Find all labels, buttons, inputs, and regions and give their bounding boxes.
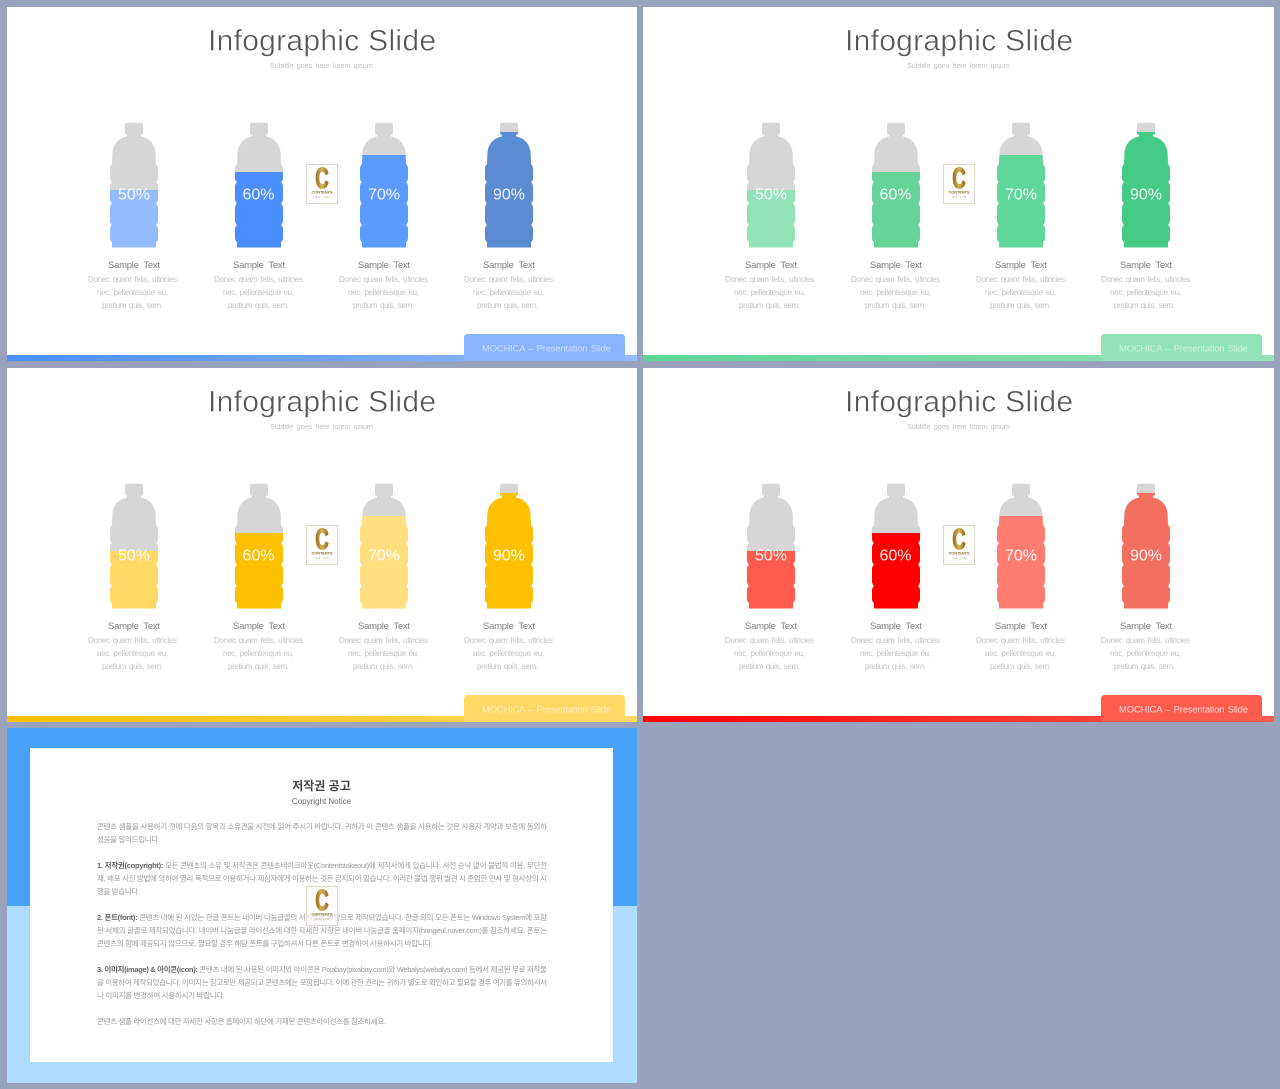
- footer tab: MOCHICA – Presentation Slide: [482, 704, 611, 716]
- caption column 4: pretium quis, sem.: [477, 662, 538, 671]
- logo: [306, 163, 338, 204]
- caption column 2: nec, pellentesque eu,: [223, 288, 294, 297]
- caption column 1: Donec quam felis, ultricies: [88, 275, 177, 284]
- caption column 1: nec, pellentesque eu,: [97, 649, 168, 658]
- footer tab: [464, 334, 625, 361]
- caption column 4: nec, pellentesque eu,: [1110, 649, 1181, 658]
- caption column 1: pretium quis, sem.: [102, 301, 163, 310]
- bottom band: [643, 716, 1274, 722]
- logo: C: [953, 524, 965, 556]
- bottle: 90%: [1122, 123, 1170, 248]
- bottle: 70%: [360, 484, 408, 608]
- section 1: copyright: 1. 저작권(copyright): 모든 콘텐츠의 소유 및 저작권은 콘텐츠테이크아웃(Contentstakeout)에 제작사에게 있습니다. 사전 승낙 없이 불법적 이용, 무단전: [97, 860, 547, 870]
- caption column 3: Sample Text: [995, 260, 1047, 271]
- caption column 3: nec, pellentesque eu,: [985, 649, 1056, 658]
- caption column 1: pretium quis, sem.: [739, 662, 800, 671]
- bottom band: [643, 355, 1274, 361]
- caption column 2: [214, 260, 303, 310]
- caption column 4: Sample Text: [1120, 260, 1172, 271]
- bottle: 50%: 50%: [118, 186, 150, 204]
- caption column 4: pretium quis, sem.: [1114, 301, 1175, 310]
- bottle: 70%: 70%: [1005, 186, 1037, 204]
- caption column 4: [1101, 260, 1190, 310]
- bottle: 90%: 90%: [1130, 548, 1162, 564]
- caption column 1: pretium quis, sem.: [739, 301, 800, 310]
- bottle: 90%: 90%: [493, 186, 525, 204]
- bottle: 60%: [872, 123, 920, 248]
- caption column 1: pretium quis, sem.: [102, 662, 163, 671]
- bottle: 70%: 70%: [1005, 548, 1037, 564]
- logo: MAIL . COM: [315, 917, 329, 921]
- caption column 2: [851, 621, 940, 671]
- caption column 2: Sample Text: [870, 260, 922, 271]
- footer tab: MOCHICA – Presentation Slide: [1119, 344, 1248, 354]
- caption column 4: Sample Text: [483, 621, 535, 632]
- footer tab: MOCHICA – Presentation Slide: [482, 344, 611, 354]
- caption column 2: Donec quam felis, ultricies: [851, 275, 940, 284]
- footer tab: [1101, 695, 1262, 722]
- logo: C: [316, 885, 328, 917]
- panel: blue bottle slide: [7, 7, 637, 361]
- logo: C: [953, 163, 965, 195]
- caption column 1: Sample Text: [745, 260, 797, 271]
- caption column 3: [976, 621, 1065, 671]
- caption column 1: Sample Text: [745, 621, 797, 632]
- bottom band: [7, 355, 637, 361]
- bottle: 60%: 60%: [242, 548, 275, 564]
- caption column 2: [851, 260, 940, 310]
- caption column 4: pretium quis, sem.: [477, 301, 538, 310]
- subtitle: Subtitle goes here lorem ipsum: [907, 61, 1010, 70]
- caption column 1: [725, 260, 814, 310]
- caption column 2: Sample Text: [233, 260, 285, 271]
- bottle: 50%: 50%: [755, 186, 787, 204]
- caption column 4: Donec quam felis, ultricies: [464, 636, 553, 645]
- bottle: 50%: 50%: [118, 548, 150, 564]
- bottle: 90%: 90%: [493, 548, 525, 564]
- caption column 3: Donec quam felis, ultricies: [339, 636, 428, 645]
- title: Infographic Slide: [208, 24, 436, 58]
- logo: [306, 885, 338, 926]
- bottle: 60%: 60%: [879, 186, 912, 204]
- title: Infographic Slide: [845, 24, 1073, 58]
- panel: copyright notice: [7, 728, 637, 1083]
- panel: green bottle slide: [643, 7, 1274, 361]
- logo: C: [316, 163, 328, 195]
- caption column 2: Donec quam felis, ultricies: [851, 636, 940, 645]
- section 2: font: 된 서체의 글꼴로 제작되었습니다. 네이버 나눔글꼴 라이선스에 대한 자세한 사항은 네이버 나눔글꼴 홈페이지(hangeul.naver.com)를 참조하세요. 폰트는: [97, 925, 547, 935]
- caption column 4: [464, 260, 553, 310]
- caption column 4: Donec quam felis, ultricies: [1101, 636, 1190, 645]
- caption column 2: nec, pellentesque eu,: [223, 649, 294, 658]
- bottle: 60%: [235, 123, 283, 248]
- caption column 3: nec, pellentesque eu,: [348, 649, 419, 658]
- caption column 4: Sample Text: [1120, 621, 1172, 632]
- logo: CONTENTS: [948, 550, 970, 556]
- caption column 2: Donec quam felis, ultricies: [214, 275, 303, 284]
- caption column 3: nec, pellentesque eu,: [985, 288, 1056, 297]
- caption column 2: Sample Text: [233, 621, 285, 632]
- subtitle: Subtitle goes here lorem ipsum: [270, 422, 373, 431]
- caption column 3: Donec quam felis, ultricies: [976, 275, 1065, 284]
- caption column 1: nec, pellentesque eu,: [734, 288, 805, 297]
- caption column 1: Sample Text: [108, 260, 160, 271]
- logo: MAIL . COM: [315, 556, 329, 560]
- caption column 3: [976, 260, 1065, 310]
- section 3: image and icon: [97, 964, 547, 1000]
- bottle: 60%: 60%: [879, 548, 912, 564]
- caption column 1: nec, pellentesque eu,: [97, 288, 168, 297]
- section 2: font: 콘텐츠의 함에 제공되지 않으므로, 필요할 경우 해당 폰트를 구입하셔서 다른 폰트로 변경하여 사용하시기 바랍니다.: [97, 938, 433, 948]
- intro paragraph: 콘텐츠 샘플을 사용하기 전에 다음의 항목과 소유권을 사전에 읽어 주시기 바랍니다. 귀하가 이 콘텐츠 샘플을 사용하는 것은 사용자 계약과 보증에 동의하: [97, 821, 547, 831]
- caption column 4: Sample Text: [483, 260, 535, 271]
- caption column 4: nec, pellentesque eu,: [473, 288, 544, 297]
- caption column 3: [339, 260, 428, 310]
- bottle: 90%: [485, 484, 533, 608]
- caption column 2: [214, 621, 303, 671]
- bottle: 50%: [747, 123, 795, 248]
- bottle: 50%: [110, 484, 158, 608]
- bottle: 60%: 60%: [242, 186, 275, 204]
- caption column 4: [1101, 621, 1190, 671]
- footer tab: [464, 695, 625, 722]
- panel: red bottle slide: [643, 368, 1274, 722]
- caption column 2: pretium quis, sem.: [865, 662, 926, 671]
- section 2: font: [97, 912, 547, 948]
- caption column 1: nec, pellentesque eu,: [734, 649, 805, 658]
- section 1: copyright: 재, 배포 사진 방법에 의하여 영리 목적으로 이용하거나 제삼자에게 이용하는 것은 금지되어 있습니다. 이러한 불법 행위 발견 시 준엄한 민사 및 형사상의 시: [97, 873, 547, 883]
- logo: [944, 524, 974, 564]
- caption column 3: Sample Text: [358, 621, 410, 632]
- caption column 2: nec, pellentesque eu,: [860, 649, 931, 658]
- caption column 2: nec, pellentesque eu,: [860, 288, 931, 297]
- bottle: 50%: [110, 123, 158, 248]
- logo: CONTENTS: [948, 190, 970, 194]
- title: Infographic Slide: [845, 386, 1073, 418]
- section 3: image and icon: 나 이미지를 변경하여 사용하시기 바랍니다.: [97, 990, 225, 1000]
- logo: MAIL . COM: [952, 195, 966, 199]
- intro paragraph: [97, 821, 547, 844]
- section 3: image and icon: 을 이용하여 제작되었습니다. 이미지는 참고로만 제공되고 콘텐츠에는 포함됩니다. 이에 관한 권리는 귀하가 별도로 확인하고 필요할 경우 여기를 유의하셔서: [97, 977, 547, 987]
- logo: MAIL . COM: [315, 195, 329, 199]
- subtitle: Subtitle goes here lorem ipsum: [907, 422, 1010, 431]
- caption column 2: pretium quis, sem.: [228, 662, 289, 671]
- logo: [944, 163, 974, 204]
- bottle: 70%: [997, 484, 1045, 608]
- intro paragraph: 셨음을 알려드립니다.: [97, 834, 160, 844]
- caption column 1: Sample Text: [108, 621, 160, 632]
- logo: MAIL . COM: [952, 556, 966, 560]
- section 2: font: 2. 폰트(font): 콘텐츠 내에 된 서있는 한글 폰트는 네이버 나눔글꼴의 서체들을 바탕으로 제작되었습니다. 한글 외의 모든 폰트는 Windows System에 포함: [97, 912, 547, 922]
- caption column 1: [725, 621, 814, 671]
- caption column 1: Donec quam felis, ultricies: [725, 275, 814, 284]
- caption column 3: Donec quam felis, ultricies: [339, 275, 428, 284]
- bottle: 90%: [485, 123, 533, 248]
- bottom band: [7, 716, 637, 722]
- section 1: copyright: [97, 860, 547, 896]
- closing note: 콘텐츠 샘플 라이선스에 대한 자세한 사항은 홈페이지 하단에 기재된 콘텐츠라이선스를 참조하세요.: [97, 1016, 386, 1026]
- heading: 저작권 공고: [292, 778, 351, 793]
- footer tab: [1101, 334, 1262, 361]
- caption column 3: Donec quam felis, ultricies: [976, 636, 1065, 645]
- caption column 2: Donec quam felis, ultricies: [214, 636, 303, 645]
- logo: [306, 524, 338, 564]
- bottle: 70%: [997, 123, 1045, 248]
- caption column 3: pretium quis, sem.: [990, 662, 1051, 671]
- bottle: 90%: [1122, 484, 1170, 608]
- caption column 3: pretium quis, sem.: [990, 301, 1051, 310]
- subheading: Copyright Notice: [292, 797, 352, 806]
- subtitle: Subtitle goes here lorem ipsum: [270, 61, 373, 70]
- caption column 4: Donec quam felis, ultricies: [464, 275, 553, 284]
- caption column 4: nec, pellentesque eu,: [1110, 288, 1181, 297]
- bottle: 50%: 50%: [755, 548, 787, 564]
- caption column 4: pretium quis, sem.: [1114, 662, 1175, 671]
- footer tab: MOCHICA – Presentation Slide: [1119, 704, 1248, 716]
- bottle: 90%: 90%: [1130, 186, 1162, 204]
- section 3: image and icon: 3. 이미지(image) & 아이콘(icon): 콘텐츠 내에 된 사용된 이미지와 아이콘은 Pixabay(pixabay.com)와 Webalys(webalys.com) 등에서 제공된 무료 저작물: [97, 964, 547, 974]
- caption column 3: [339, 621, 428, 671]
- caption column 2: Sample Text: [870, 621, 922, 632]
- caption column 4: Donec quam felis, ultricies: [1101, 275, 1190, 284]
- caption column 2: pretium quis, sem.: [865, 301, 926, 310]
- logo: CONTENTS: [312, 550, 333, 556]
- caption column 1: Donec quam felis, ultricies: [88, 636, 177, 645]
- caption column 4: nec, pellentesque eu,: [473, 649, 544, 658]
- caption column 3: Sample Text: [358, 260, 410, 271]
- caption column 3: pretium quis, sem.: [353, 662, 414, 671]
- bottle: 70%: [360, 123, 408, 248]
- caption column 2: pretium quis, sem.: [228, 301, 289, 310]
- caption column 1: [88, 621, 177, 671]
- logo: CONTENTS: [312, 190, 333, 194]
- caption column 1: Donec quam felis, ultricies: [725, 636, 814, 645]
- caption column 4: [464, 621, 553, 671]
- bottle: 70%: 70%: [368, 548, 400, 564]
- caption column 3: pretium quis, sem.: [353, 301, 414, 310]
- logo: CONTENTS: [312, 912, 333, 916]
- bottle: 70%: 70%: [368, 186, 400, 204]
- caption column 3: Sample Text: [995, 621, 1047, 632]
- bottle: 50%: [747, 484, 795, 608]
- caption column 1: [88, 260, 177, 310]
- caption column 3: nec, pellentesque eu,: [348, 288, 419, 297]
- logo: C: [316, 524, 328, 556]
- bottle: 60%: [872, 484, 920, 608]
- title: Infographic Slide: [208, 386, 436, 418]
- panel: yellow bottle slide: [7, 368, 637, 722]
- bottle: 60%: [235, 484, 283, 608]
- section 1: copyright: 행을 받습니다.: [97, 886, 140, 896]
